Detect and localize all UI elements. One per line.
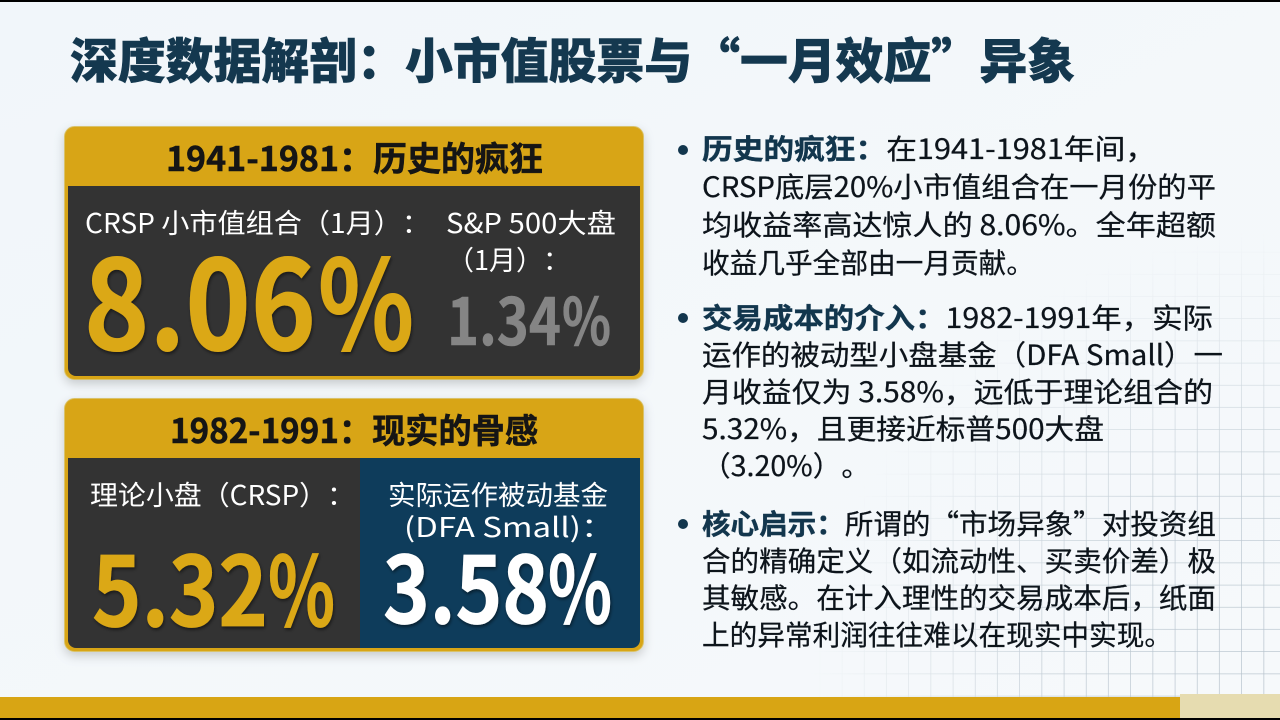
label: theoretical: 理论小盘（CRSP）： — [90, 474, 355, 513]
label: S&P 500: S&P 500大盘 — [446, 202, 616, 241]
label: CRSP small cap: CRSP 小市值组合（1月）： — [85, 202, 430, 241]
value: 8.06%: 8.06 — [84, 206, 316, 386]
value: 1.34%: % — [562, 270, 611, 364]
value: 5.32%: 5.32 — [92, 515, 268, 654]
text block: history: 历史的疯狂： 在1941-1981年间， — [702, 128, 1156, 168]
panel: 1941-1981 — [64, 126, 644, 386]
value: 5.32%: % — [268, 515, 335, 654]
label: actual passive fund — [388, 474, 614, 545]
bullet — [678, 313, 688, 323]
text block: history: 收益几乎全部由一月贡献。 — [702, 242, 1034, 282]
text block: history — [678, 128, 1216, 282]
text block: transaction costs — [678, 297, 1223, 485]
value: 3.58%: 3.58 — [383, 517, 549, 650]
text block: key takeaway — [678, 503, 1216, 654]
panel: 1982-1991 — [64, 398, 644, 654]
text block: history: CRSP底层20%小市值组合在一月份的平 — [702, 166, 1216, 206]
text block: history: 均收益率高达惊人的 8.06%。全年超额 — [702, 204, 1216, 244]
bullet — [678, 519, 688, 529]
text block: transaction costs: 交易成本的介入： 1982-1991年，实际 — [702, 297, 1213, 337]
title: 深度数据解剖：小市值股票与“一月效应”异象 — [70, 22, 1075, 92]
text block: key takeaway: 上的异常利润往往难以在现实中实现。 — [702, 614, 1172, 654]
label: S&P 500 — [446, 202, 616, 278]
panel heading: 1982-1991: 1982-1991：现实的骨感 — [170, 404, 538, 453]
text block: key takeaway: 其敏感。在计入理性的交易成本后，纸面 — [702, 577, 1216, 617]
label: actual passive fund: 实际运作被动基金 — [388, 474, 608, 513]
text block: transaction costs: 月收益仅为 3.58%，远低于理论组合的 — [702, 371, 1213, 411]
text block: key takeaway: 核心启示：所谓的“市场异象”对投资组 — [702, 503, 1216, 543]
text block: key takeaway: 合的精确定义（如流动性、买卖价差）极 — [702, 540, 1216, 580]
text block: transaction costs: （3.20%）。 — [702, 445, 870, 485]
panel heading: 1941-1981: 1941-1981：历史的疯狂 — [166, 132, 543, 181]
text block: transaction costs: 5.32%，且更接近标普500大盘 — [702, 408, 1104, 448]
value: 8.06%: % — [318, 206, 414, 386]
footer bar — [0, 694, 1280, 720]
label: S&P 500: （1月）： — [447, 239, 570, 278]
bullet — [678, 145, 688, 155]
value: 1.34%: 1.34 — [447, 270, 561, 364]
label: actual passive fund: (DFA Small)： — [404, 506, 614, 545]
text block: transaction costs: 运作的被动型小盘基金（DFA Small）一 — [702, 334, 1223, 374]
value: 3.58%: % — [548, 517, 612, 650]
